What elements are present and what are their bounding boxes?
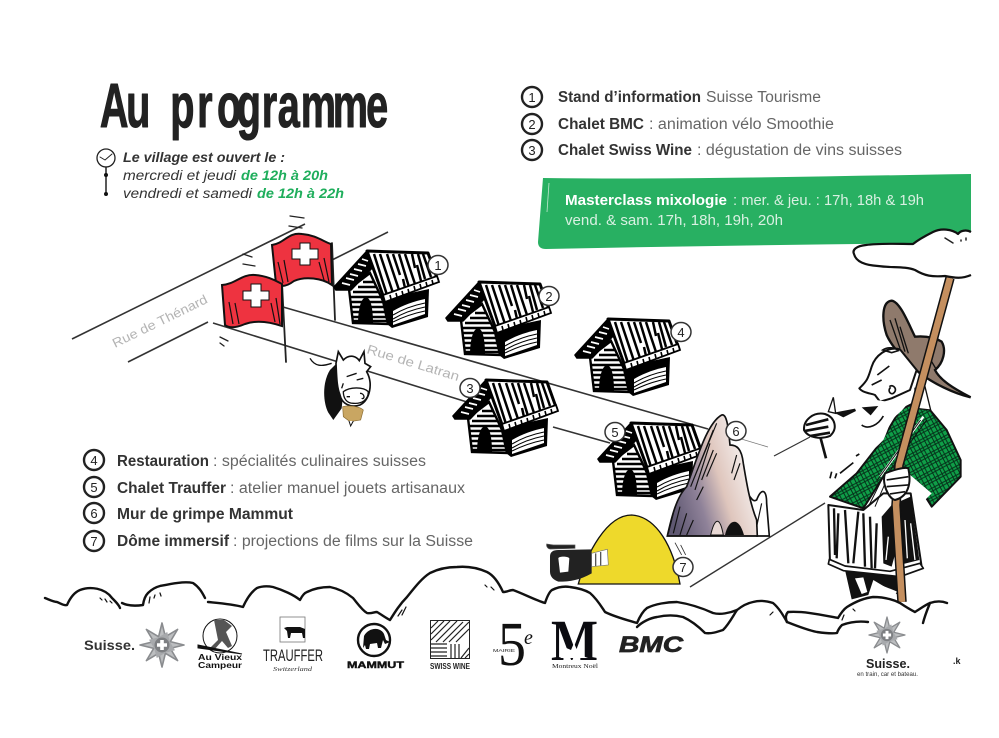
logo: Mammut: MAMMUT — [347, 660, 405, 670]
beard — [818, 393, 912, 487]
logo: Suisse Tourisme: Suisse. — [84, 638, 135, 653]
hat shading — [890, 318, 937, 370]
cloud at the top of the staff — [854, 230, 971, 278]
legend: stands 1 to 3 — [522, 87, 902, 160]
logo: Trauffer — [263, 617, 323, 673]
panel: masterclass mixologie: : mer. & jeu. : 17h, 18h & 19h — [733, 192, 924, 209]
logo: Trauffer: Switzerland — [273, 666, 313, 673]
legend: stands 1 to 3: 1 — [528, 90, 536, 105]
legs and apron — [828, 493, 923, 599]
opening hours text: de 12h à 22h — [257, 186, 344, 201]
legend: stands 1 to 3: Chalet Swiss Wine — [558, 142, 692, 159]
legend: stands 4 to 7: 5 — [90, 480, 98, 495]
raised hand with glass — [804, 397, 856, 458]
logo: Suisse Tourisme — [84, 623, 184, 667]
logo: Mairie du 5e: MAIRIE — [493, 648, 515, 653]
chalet 5 — [598, 423, 703, 500]
number badges on the map: 1 — [434, 258, 442, 273]
opening hours text — [123, 150, 344, 201]
logo: Mairie du 5e: e — [524, 627, 533, 649]
chalet 3 — [453, 380, 558, 457]
logo: Trauffer: TRAUFFER — [263, 646, 323, 665]
legend: stands 1 to 3: 3 — [528, 143, 536, 158]
staff — [896, 278, 950, 602]
logo: Mammut — [347, 624, 405, 670]
map: streets: Rue de Thénard — [110, 292, 210, 351]
opening hours text: vendredi et samedi — [123, 186, 253, 201]
smile — [830, 416, 883, 478]
legend: stands 4 to 7: 6 — [90, 506, 98, 521]
face — [859, 349, 917, 402]
legend: stands 4 to 7: Chalet Trauffer — [117, 480, 226, 497]
icon: clock — [97, 149, 115, 196]
legend: stands 4 to 7: : spécialités culinaires suisses — [213, 453, 426, 470]
legend: stands 4 to 7: Dôme immersif — [117, 533, 230, 550]
icon: projector camera — [547, 544, 608, 582]
logo: Suisse en train, car et bateau: Suisse. — [866, 656, 910, 671]
legend: stands 4 to 7: Mur de grimpe Mammut — [117, 506, 293, 523]
opening hours text: Le village est ouvert le : — [123, 150, 285, 165]
panel: masterclass mixologie: vend. & sam. 17h, 18h, 19h, 20h — [565, 212, 783, 229]
illustration: yellow dome — [578, 515, 686, 584]
number badges on the map: 4 — [677, 325, 685, 340]
chalet 4 — [575, 319, 680, 396]
logo: Montreux Noël: Montreux Noël — [552, 663, 598, 670]
number badges on the map: 6 — [732, 424, 740, 439]
number badges on the map: 2 — [545, 289, 553, 304]
mountain: climbing wall — [667, 415, 769, 536]
title: Au programme — [100, 72, 388, 141]
upper body and face — [804, 301, 971, 508]
hat — [883, 301, 971, 397]
logo: Mairie du 5e: 5 — [498, 611, 526, 679]
panel: masterclass mixologie: Masterclass mixologie — [565, 192, 727, 209]
number badges on the map: 3 — [466, 381, 474, 396]
panel: masterclass mixologie — [538, 174, 971, 249]
legend: stands 4 to 7: : atelier manuel jouets artisanaux — [230, 480, 465, 497]
legend: stands 1 to 3: Suisse Tourisme — [706, 89, 821, 106]
legend: stands 4 to 7: 7 — [90, 534, 98, 549]
map: streets: Rue de Latran — [365, 342, 461, 384]
opening hours text: de 12h à 20h — [241, 168, 328, 183]
bottom cloud outline — [45, 567, 947, 633]
legend: stands 1 to 3: Chalet BMC — [558, 116, 644, 133]
illustration: cow with bell — [310, 352, 371, 426]
illustration: swiss mountain man with staff — [804, 278, 971, 602]
chalet 1 — [334, 251, 439, 328]
legend: stands 1 to 3: : dégustation de vins suisses — [697, 142, 902, 159]
logo: Suisse en train, car et bateau: .k — [953, 656, 962, 666]
face details — [872, 348, 898, 394]
number badges on the map: 7 — [679, 560, 687, 575]
legend: stands 1 to 3: : animation vélo Smoothie — [649, 116, 834, 133]
logo: Swiss Wine: SWISS WINE — [430, 662, 471, 671]
logo: Au Vieux Campeur: Campeur — [198, 660, 243, 670]
icon: swiss flags — [220, 216, 335, 362]
hand on staff — [884, 468, 910, 500]
logo: Suisse en train, car et bateau: en train, car et bateau. — [857, 672, 918, 678]
legend: stands 4 to 7: 4 — [90, 453, 98, 468]
logo: Au Vieux Campeur: Au Vieux — [198, 652, 242, 662]
number badges on the map: 5 — [611, 425, 619, 440]
number badges on the map — [428, 256, 746, 576]
logo: Swiss Wine — [430, 620, 471, 671]
chalet 2 — [446, 282, 551, 359]
neck — [915, 387, 931, 410]
map: streets — [72, 224, 825, 587]
shirt — [830, 403, 961, 508]
legend: stands 4 to 7: : projections de films sur la Suisse — [233, 533, 473, 550]
logo: Au Vieux Campeur — [198, 619, 243, 670]
logo: Montreux Noël: M — [551, 608, 598, 673]
mouth and beard marks — [862, 406, 878, 415]
legend: stands 1 to 3: Stand d’information — [558, 89, 701, 106]
opening hours text: mercredi et jeudi — [123, 168, 237, 183]
legend: stands 4 to 7 — [84, 450, 473, 551]
logo: Suisse en train, car et bateau — [857, 617, 962, 678]
legend: stands 4 to 7: Restauration — [117, 453, 209, 470]
legend: stands 1 to 3: 2 — [528, 117, 536, 132]
logo: BMC: BMC — [619, 632, 684, 657]
